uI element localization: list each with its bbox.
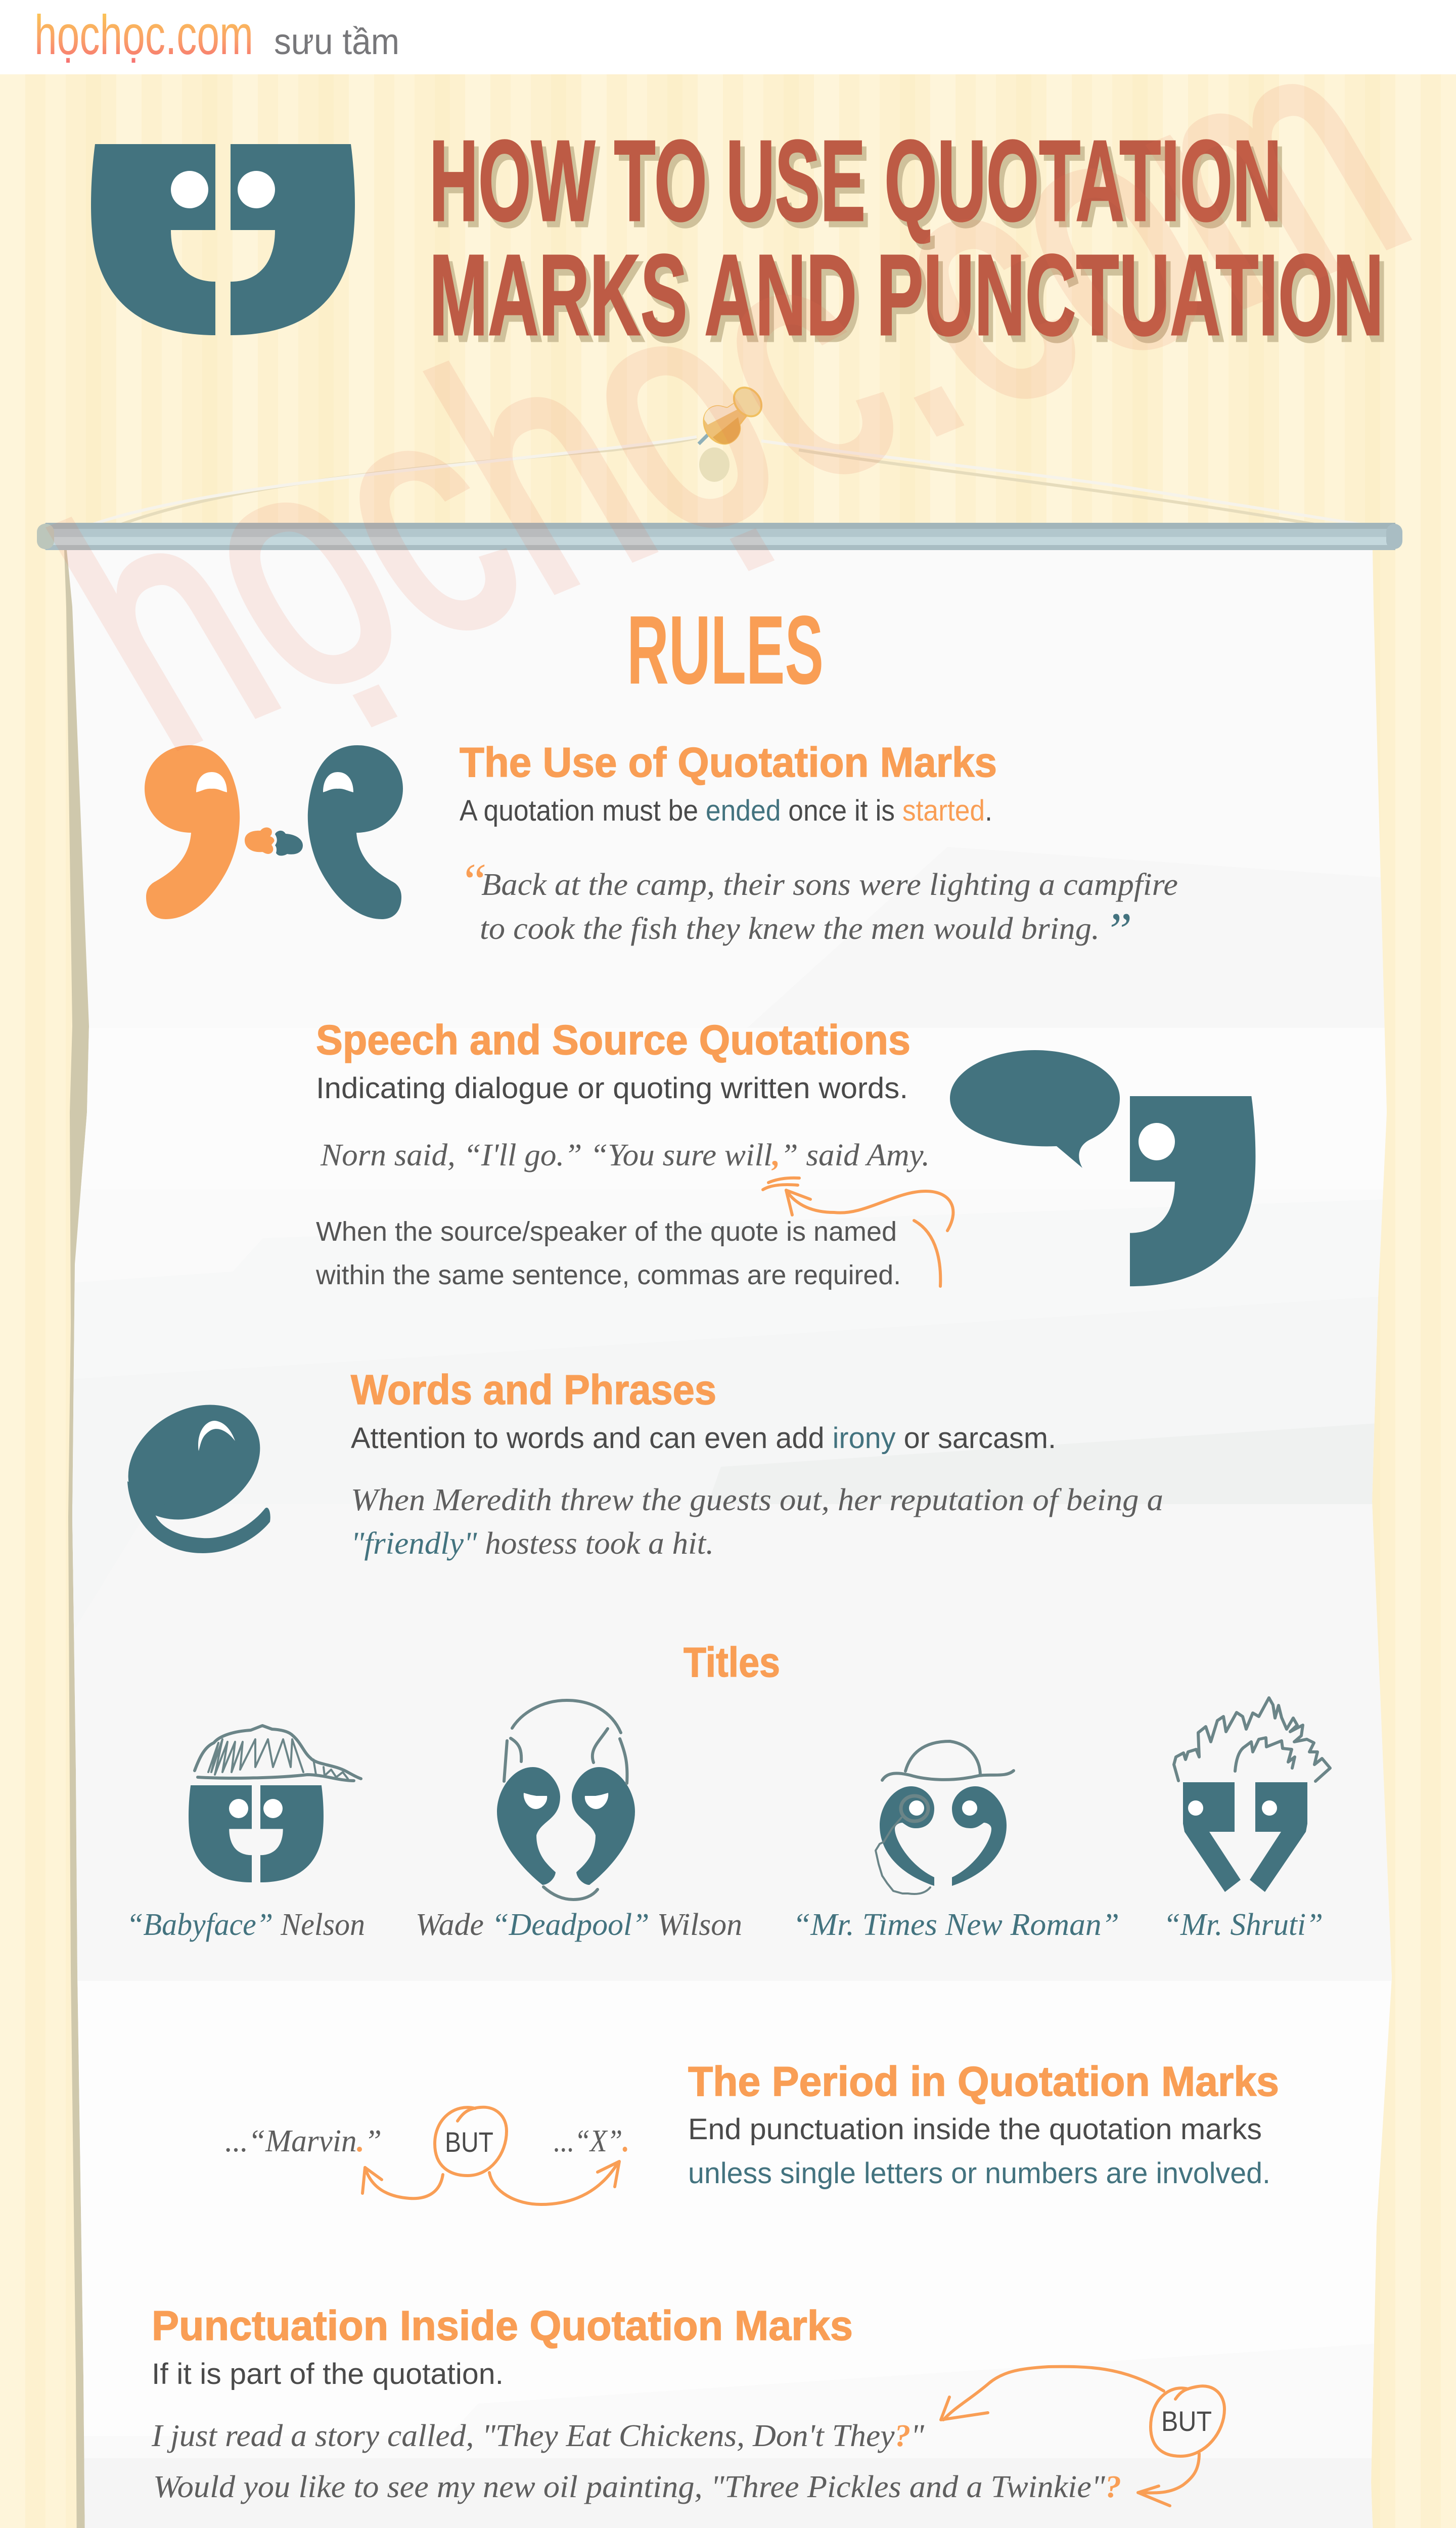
- section: speech and source quotations: [315, 1016, 930, 1290]
- section: the use of quotation marks: The Use of Quotation Marks: [460, 739, 997, 786]
- face captions: “Mr. Times New Roman”: [793, 1908, 1119, 1942]
- section: speech and source quotations: Norn said, “I'll go.” “You sure will ,” said Amy.: [320, 1138, 930, 1172]
- section: the use of quotation marks: “: [459, 853, 487, 909]
- heading: titles: Titles: [684, 1639, 780, 1686]
- section: the use of quotation marks: Back at the camp, their sons were lighting a campfire: [481, 868, 1178, 902]
- section: speech and source quotations: Speech and Source Quotations: [316, 1016, 911, 1063]
- but callout with arrows: [362, 2107, 619, 2204]
- hanging string: [93, 437, 1360, 524]
- but callout with arrows, punctuation: [941, 2367, 1224, 2506]
- heading: rules: RULES: [627, 595, 824, 704]
- icon: smiling single quote: [107, 1382, 281, 1553]
- section: the period in quotation marks: ...“X”.: [554, 2124, 629, 2158]
- icon: babyface nelson: [189, 1726, 361, 1882]
- section: the period in quotation marks: unless single letters or numbers are involved.: [688, 2157, 1270, 2190]
- face captions: [126, 1908, 1323, 1942]
- section: words and phrases: [351, 1366, 1163, 1561]
- section: the period in quotation marks: [225, 2058, 1279, 2190]
- section: the period in quotation marks: End punctuation inside the quotation marks: [688, 2113, 1262, 2146]
- icon: mr times new roman: [876, 1741, 1014, 1894]
- section: punctuation inside quotation marks: Punctuation Inside Quotation Marks: [152, 2302, 853, 2349]
- site logo header: sưu tầm: [274, 22, 399, 62]
- section: the use of quotation marks: [459, 739, 1178, 959]
- section: words and phrases: When Meredith threw the guests out, her reputation of being a: [351, 1483, 1163, 1517]
- section: punctuation inside quotation marks: If it is part of the quotation.: [152, 2358, 504, 2390]
- site logo header: họchọc.com: [34, 4, 253, 66]
- title: [429, 117, 1388, 366]
- section: speech and source quotations: within the same sentence, commas are required.: [315, 1260, 901, 1290]
- roller rod: [37, 523, 1402, 550]
- paper sheet with fold shading: [51, 550, 1416, 2528]
- section: punctuation inside quotation marks: [151, 2302, 1121, 2504]
- icon: two facing quotation figures: [145, 745, 403, 919]
- face captions: “Babyface” Nelson: [126, 1908, 365, 1942]
- section: the period in quotation marks: ...“Marvin.”: [225, 2124, 382, 2158]
- but callout with arrows, punctuation: BUT: [1161, 2405, 1212, 2437]
- icon: speech bubble: [950, 1050, 1120, 1168]
- icon: push pin: [699, 382, 767, 482]
- section: punctuation inside quotation marks: Would you like to see my new oil painting, "Three Pickles and a Twinkie" ?: [153, 2470, 1121, 2504]
- section: the use of quotation marks: ”: [1104, 902, 1132, 959]
- section: the use of quotation marks: A quotation must be ended once it is started.: [460, 794, 992, 827]
- section: words and phrases: Words and Phrases: [351, 1366, 716, 1413]
- arrow: comma callout: [763, 1178, 953, 1286]
- section: words and phrases: "friendly" hostess took a hit.: [351, 1526, 714, 1561]
- section: words and phrases: Attention to words and can even add irony or sarcasm.: [351, 1422, 1056, 1455]
- section: the period in quotation marks: The Period in Quotation Marks: [688, 2058, 1279, 2105]
- icon: main quotation mark face: [91, 144, 355, 335]
- section: speech and source quotations: When the source/speaker of the quote is named: [316, 1216, 897, 1247]
- paper shadow: [64, 550, 1387, 2528]
- face captions: “Mr. Shruti”: [1163, 1908, 1323, 1942]
- face captions: Wade “Deadpool” Wilson: [416, 1908, 742, 1942]
- section: the use of quotation marks: to cook the fish they knew the men would bring.: [480, 912, 1100, 946]
- icon: mr shruti: [1174, 1698, 1330, 1892]
- section: punctuation inside quotation marks: I just read a story called, "They Eat Chickens, Don't They ?": [151, 2419, 925, 2453]
- section: speech and source quotations: Indicating dialogue or quoting written words.: [316, 1072, 908, 1105]
- icon: big closing comma: [1130, 1096, 1255, 1286]
- but callout with arrows: BUT: [445, 2126, 493, 2158]
- icon: wade deadpool wilson: [497, 1700, 635, 1900]
